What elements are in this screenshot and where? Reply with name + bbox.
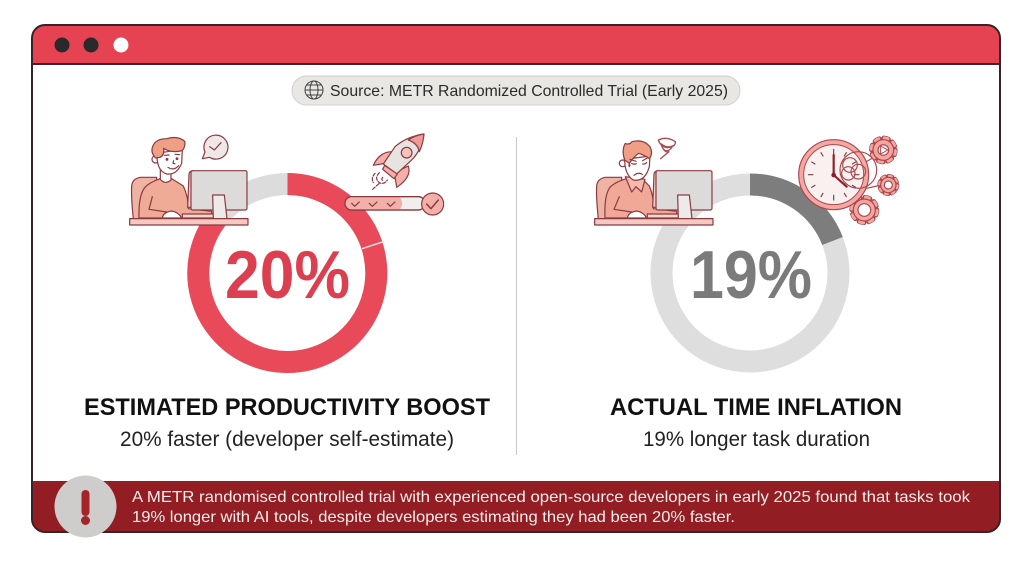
face [157,149,182,174]
icon: rocket [372,134,424,189]
gear top [871,138,895,162]
connectors [863,157,882,188]
ear [619,160,626,167]
icon: globe [305,81,323,99]
callout banner [32,481,1000,532]
keyboard [647,214,680,218]
donut chart: 19% [662,184,838,362]
source pill [292,76,740,105]
icon: speech bubble with check [202,135,228,159]
subheading: 19% longer: 19% longer task duration [643,428,870,451]
overlapping circles [840,152,877,188]
banner text: A METR randomised controlled trial with experienced open-source developers in early 2025 found that tasks took [132,489,971,506]
ear [152,156,159,163]
neck [160,169,171,182]
divider [516,137,517,455]
value: 20%: 20% [225,237,350,313]
browser window panel [33,26,999,65]
hair [623,141,652,163]
subheading: 20% faster: 20% faster (developer self-estimate) [120,428,454,451]
hand [627,211,647,218]
desk [595,219,713,225]
donut chart: 20% [198,184,384,362]
heading: actual time inflation: ACTUAL TIME INFLATION [610,394,902,421]
collar [625,177,645,192]
icon: stressed developer at desk [595,141,713,225]
sad face [630,158,647,175]
torso [605,179,677,219]
hair [152,138,185,158]
smile and eyes [164,154,180,169]
gear middle [879,176,897,194]
monitor [653,171,659,207]
banner text: 19% longer with AI tools, despite developers estimating they had been 20% faster. [132,509,735,526]
gear bottom [852,197,877,223]
chair [132,177,157,219]
source text: Source: METR Randomized Controlled Trial (Early 2025) [330,83,728,100]
icon: happy developer at desk [130,138,248,225]
value: 19%: 19% [690,237,812,313]
clock hands [834,155,847,187]
keyboard [182,214,215,218]
chair [597,177,622,219]
clock face [799,140,869,210]
window control dots [54,38,128,52]
hand [162,211,182,218]
monitor [188,171,194,207]
icon: exclamation badge [54,476,116,538]
icon: stress swirl [658,138,675,159]
heading: estimated productivity boost: ESTIMATED PRODUCTIVITY BOOST [84,394,490,421]
icon: clock and gears [799,138,897,223]
desk [130,219,248,225]
window title bar [32,25,1000,65]
progress bar with checks [345,193,444,215]
face [625,156,650,180]
torso [139,179,212,219]
